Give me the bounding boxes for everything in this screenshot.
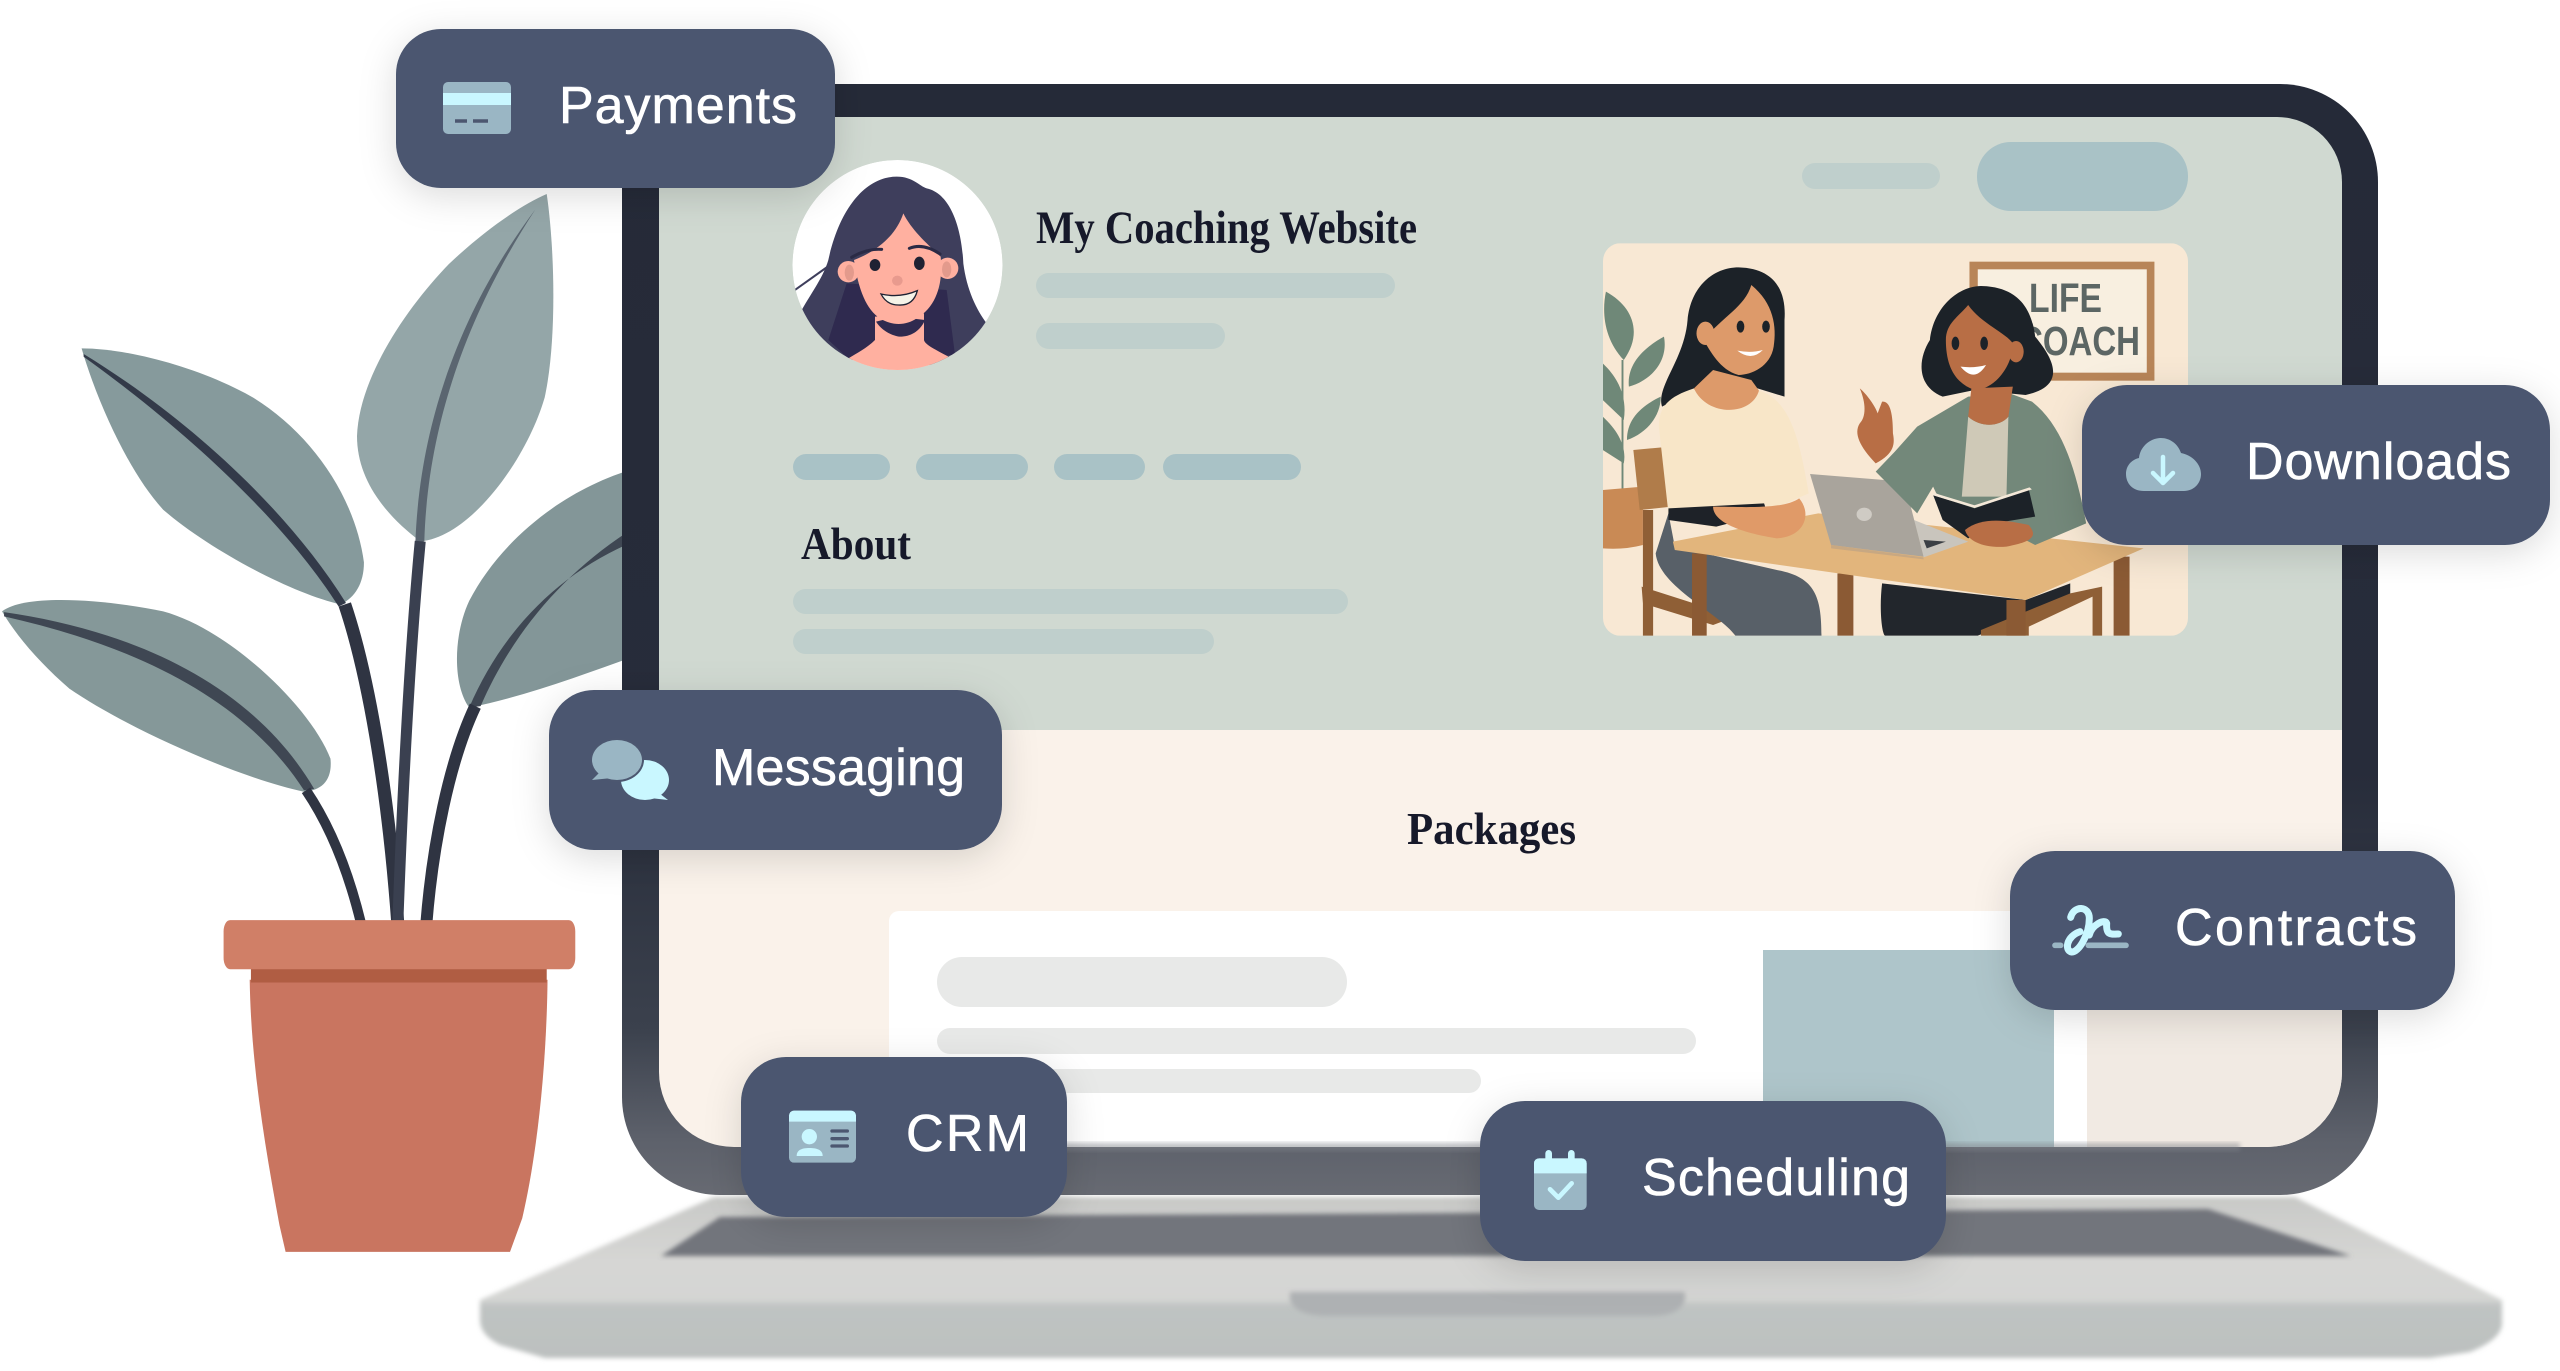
chair [1633, 447, 1672, 510]
pill: Downloads [2082, 385, 2550, 545]
laptop base [480, 1197, 2502, 1358]
right person legs [1881, 583, 2070, 636]
pill: Payments [396, 29, 835, 188]
wall sign text: LIFE [2029, 275, 2102, 321]
plant: leaves and stems [2, 194, 653, 924]
left person hair and body [1661, 267, 1785, 407]
laptop screen [659, 117, 2342, 1171]
right person [1922, 286, 2053, 397]
pill: Contracts [2010, 851, 2455, 1010]
packages heading: Packages [1407, 804, 1576, 854]
small plant [1603, 292, 1665, 463]
left person pants [1656, 513, 1821, 636]
nav button [1977, 142, 2188, 211]
avatar [792, 160, 1002, 377]
icon: signature [2055, 908, 2126, 952]
tagline placeholder bars [1036, 273, 1395, 349]
pill: CRM [741, 1057, 1067, 1217]
icon: calendar check [1534, 1153, 1587, 1210]
about text bars [793, 589, 1348, 654]
screen bottom soft edge [760, 1143, 2240, 1151]
coaching illustration [1603, 243, 2188, 636]
keyboard [661, 1209, 2351, 1256]
trackpad notch [1290, 1292, 1685, 1316]
pill: Messaging: Messaging [712, 739, 965, 797]
pill: Messaging [549, 690, 1002, 850]
nav small pill [1802, 163, 1940, 189]
coaching illustration: COACH [2019, 318, 2140, 364]
pill: Scheduling [1480, 1101, 1946, 1261]
hero section background [659, 117, 2342, 730]
navigation tabs [793, 454, 1301, 480]
about heading: About [801, 518, 912, 569]
packages section background [659, 730, 2342, 1150]
icon: contact card [789, 1111, 856, 1163]
pill: Payments: Payments [559, 77, 797, 135]
table [1692, 553, 2130, 636]
pill: Scheduling: Scheduling [1642, 1149, 1910, 1207]
pill: Contracts: Contracts [2175, 899, 2417, 957]
left person hands [1713, 498, 1805, 538]
pill: Downloads: Downloads [2246, 433, 2511, 491]
pot [224, 920, 575, 1252]
laptop bezel [622, 84, 2378, 1195]
icon: credit card [443, 82, 511, 134]
package card [889, 911, 2087, 1171]
icon: chat bubbles [590, 738, 669, 800]
icon: cloud download [2126, 438, 2201, 491]
site title: My Coaching Website [1036, 202, 1417, 254]
laptop [1914, 520, 1968, 557]
pill: CRM: CRM [906, 1105, 1029, 1163]
